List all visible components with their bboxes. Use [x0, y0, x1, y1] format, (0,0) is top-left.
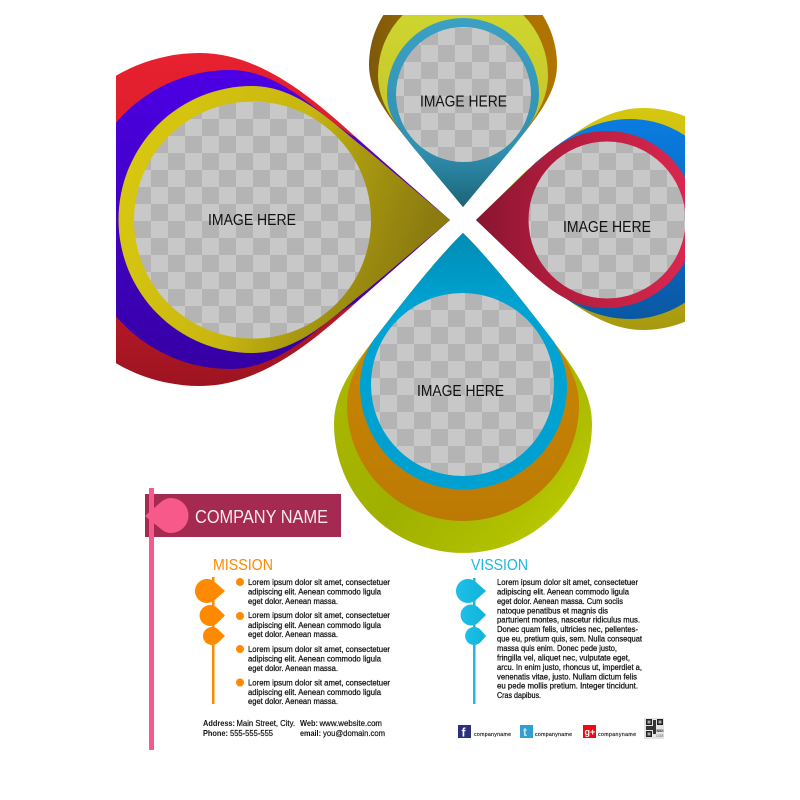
social: google plus: companyname [598, 732, 636, 738]
icon: banner droplet [145, 498, 189, 533]
banner: company name: COMPANY NAME [195, 507, 328, 527]
icon: mission timeline [195, 577, 225, 704]
text block: vission body: que eu, pretium quis, sem. Nulla consequat [497, 634, 643, 644]
list: mission bullets: Lorem ipsum dolor sit amet, consectetuer [248, 644, 390, 654]
text block: vission body [497, 577, 643, 700]
contact details: Main Street, City. [236, 719, 295, 728]
list: mission bullets: eget dolor. Aenean massa. [248, 663, 338, 673]
text block: vission body: venenatis vitae, justo. Nullam dictum felis [497, 671, 637, 681]
panel: bottom droplet image holder [334, 233, 592, 553]
contact details: Address: [203, 719, 235, 728]
text block: vission body: Cras dapibus. [497, 690, 541, 700]
list: mission bullets: Lorem ipsum dolor sit amet, consectetuer [248, 610, 390, 620]
list: mission bullets [236, 577, 390, 706]
text block: vission body: arcu. In enim justo, rhoncus ut, imperdiet a, [497, 662, 642, 672]
text block: vission body: natoque penatibus et magnis dis [497, 605, 608, 615]
text block: vission body: Lorem ipsum dolor sit amet, consectetuer [497, 577, 638, 587]
panel: bottom droplet image holder: IMAGE HERE [417, 383, 504, 400]
list: mission bullets: eget dolor. Aenean massa. [248, 696, 338, 706]
list: mission bullets: adipiscing elit. Aenean commodo ligula [248, 687, 381, 697]
icon: qr code [644, 718, 664, 739]
panel: top droplet image holder [369, 0, 557, 207]
list: mission bullets: Lorem ipsum dolor sit amet, consectetuer [248, 678, 390, 688]
social: twitter: companyname [535, 732, 572, 738]
list: mission bullets: adipiscing elit. Aenean commodo ligula [248, 654, 381, 664]
contact details: 555-555-555 [230, 729, 273, 738]
text block: vission body: parturient montes, nascetur ridiculus mus. [497, 615, 640, 625]
social: facebook: companyname [474, 732, 511, 738]
panel: left droplet image holder [116, 53, 450, 386]
icon: qr code: CODE [656, 734, 664, 738]
icon: qr code: BIDI [656, 729, 664, 733]
contact details: email: [300, 729, 321, 738]
social: facebook: f [462, 726, 466, 740]
icon: vission timeline [456, 578, 486, 704]
heading: mission: MISSION [213, 557, 273, 574]
panel: top droplet image holder: IMAGE HERE [420, 94, 507, 110]
list: mission bullets: eget dolor. Aenean massa. [248, 596, 338, 606]
panel: right droplet image holder [476, 108, 685, 330]
contact details: you@domain.com [323, 729, 385, 738]
social: facebook [458, 725, 511, 740]
social: google plus: g+ [584, 727, 595, 737]
list: mission bullets: adipiscing elit. Aenean commodo ligula [248, 586, 381, 596]
panel: left droplet image holder: IMAGE HERE [208, 212, 296, 229]
text block: vission body: massa quis enim. Donec pede justo, [497, 643, 617, 653]
social: twitter [520, 725, 572, 739]
heading: vission: VISSION [471, 557, 528, 574]
contact details [203, 719, 385, 738]
text block: vission body: adipiscing elit. Aenean commodo ligula [497, 586, 629, 596]
contact details: Phone: [203, 729, 228, 738]
panel: right droplet image holder: IMAGE HERE [563, 219, 651, 236]
list: mission bullets: adipiscing elit. Aenean commodo ligula [248, 620, 381, 630]
contact details: Web: [300, 719, 318, 728]
text block: vission body: eu pede mollis pretium. Integer tincidunt. [497, 681, 638, 691]
social: twitter: t [523, 725, 527, 739]
text block: vission body: fringilla vel, aliquet nec, vulputate eget, [497, 652, 630, 662]
text block: vission body: Donec quam felis, ultricies nec, pellentes- [497, 624, 638, 634]
social: google plus [583, 725, 636, 738]
contact details: www.website.com [319, 719, 382, 728]
list: mission bullets: eget dolor. Aenean massa. [248, 629, 338, 639]
text block: vission body: eget dolor. Aenean massa. Cum sociis [497, 596, 623, 606]
banner: company name [145, 488, 341, 750]
list: mission bullets: Lorem ipsum dolor sit amet, consectetuer [248, 577, 390, 587]
